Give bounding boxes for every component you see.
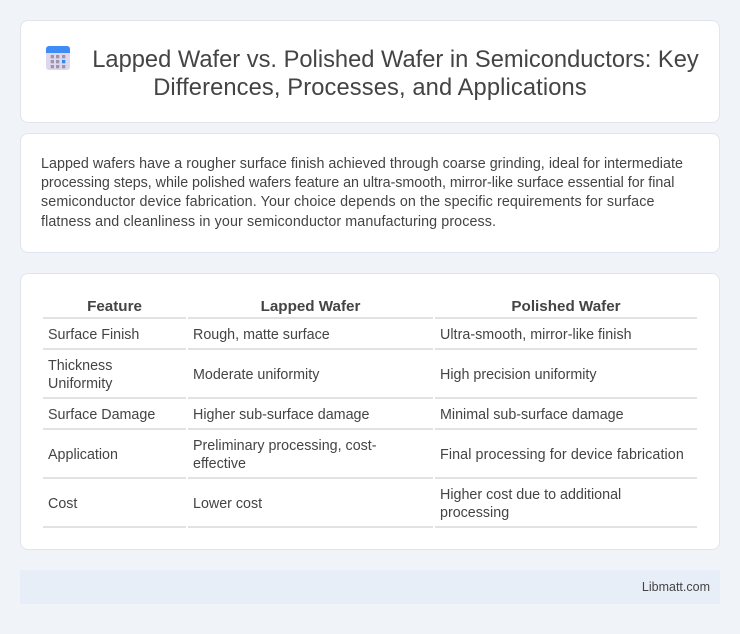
table header row: Polished Wafer [511,298,621,315]
panel: comparison table [20,273,720,550]
row: surface finish: Rough, matte surface [193,327,330,343]
title [92,47,699,101]
row: application: Preliminary processing, cost- [193,438,377,454]
row: cost: processing [440,505,509,521]
summary text [41,156,683,230]
row: thickness uniformity: Uniformity [48,376,112,392]
row: surface finish [48,327,632,343]
row: application: effective [193,456,246,472]
summary text: Lapped wafers have a rougher surface finish achieved through coarse grinding, ideal for intermediate [41,156,683,172]
summary text: semiconductor device fabrication. Your choice depends on the specific requirements for surface [41,194,655,210]
row: thickness uniformity: High precision uniformity [440,367,597,383]
row: application: Final processing for device fabrication [440,447,684,463]
footer bar [20,570,720,604]
row: cost [48,487,621,521]
row: application: Application [48,447,118,463]
row: thickness uniformity [48,358,597,392]
row: surface damage: Higher sub-surface damage [193,407,369,423]
row: cost: Lower cost [193,496,262,512]
row: surface damage [48,407,624,423]
row: thickness uniformity: Thickness [48,358,112,374]
row: application [48,438,684,472]
row: cost: Cost [48,496,77,512]
footer text: Libmatt.com [642,580,710,594]
icon: calendar grid [46,46,70,70]
row: surface finish: Surface Finish [48,327,139,343]
row: surface damage: Surface Damage [48,407,155,423]
row: surface finish: Ultra-smooth, mirror-like finish [440,327,632,343]
row: surface damage: Minimal sub-surface damage [440,407,624,423]
summary text: processing steps, while polished wafers feature an ultra-smooth, mirror-like surface essential for final [41,175,674,191]
title: Lapped Wafer vs. Polished Wafer in Semiconductors: Key [92,47,699,73]
title: Differences, Processes, and Applications [153,75,587,101]
table header row: Lapped Wafer [261,298,360,315]
panel: header [20,20,720,123]
table header row [87,298,621,315]
table header row: Feature [87,298,142,315]
row: thickness uniformity: Moderate uniformity [193,367,319,383]
summary text: flatness and cleanliness in your semiconductor manufacturing process. [41,214,496,230]
row: cost: Higher cost due to additional [440,487,621,503]
panel: summary [20,133,720,253]
